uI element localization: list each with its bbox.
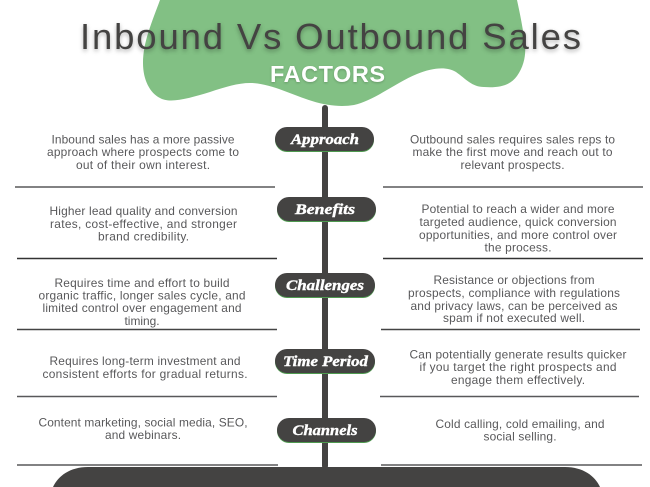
outbound time period text: if you target the right prospects and [420, 360, 616, 374]
outbound benefits text: targeted audience, quick conversion [420, 215, 616, 229]
channels dividers [17, 464, 642, 466]
subtitle: factors: FACTORS [270, 61, 385, 87]
inbound time period text [42, 354, 248, 381]
outbound time period text: engage them effectively. [451, 373, 585, 387]
outbound benefits text: opportunities, and more control over [419, 228, 617, 242]
outbound benefits text: the process. [484, 240, 552, 254]
benefits pill [277, 197, 376, 222]
outbound approach text: make the first move and reach out to [412, 145, 613, 159]
challenges pill: Challenges [286, 278, 364, 294]
time period pill: Time Period [283, 354, 369, 370]
outbound challenges text [408, 273, 620, 325]
challenges dividers [17, 328, 640, 330]
approach pill [275, 127, 374, 152]
outbound channels text [436, 417, 604, 444]
outbound approach text: relevant prospects. [460, 158, 564, 172]
time period pill [275, 349, 375, 374]
inbound approach text [47, 132, 239, 172]
row: approach [15, 127, 643, 187]
row: channels [17, 416, 642, 465]
challenges pill [275, 273, 375, 298]
approach dividers [15, 186, 643, 188]
inbound channels text: and webinars. [105, 428, 181, 442]
inbound approach text: out of their own interest. [76, 158, 210, 172]
row: challenges [17, 273, 640, 330]
outbound channels text: Cold calling, cold emailing, and [436, 417, 604, 431]
inbound challenges text [38, 276, 246, 328]
outbound time period text [410, 348, 627, 387]
approach pill: Approach [290, 132, 359, 148]
inbound benefits text: brand credibility. [98, 230, 189, 244]
time period dividers [17, 396, 639, 398]
row: benefits [17, 197, 643, 258]
inbound approach text: Inbound sales has a more passive [52, 132, 235, 146]
inbound challenges text: Requires time and effort to build [54, 276, 230, 290]
outbound approach text [410, 132, 615, 172]
channels pill: Channels [292, 423, 358, 439]
bottom dark panel [53, 467, 600, 487]
inbound benefits text: Higher lead quality and conversion [50, 204, 238, 218]
benefits dividers [17, 258, 643, 260]
inbound channels text: Content marketing, social media, SEO, [38, 416, 248, 430]
benefits pill: Benefits [294, 202, 355, 218]
inbound channels text [38, 416, 248, 442]
inbound time period text: Requires long-term investment and [50, 354, 240, 368]
inbound challenges text: organic traffic, longer sales cycle, and [38, 288, 246, 302]
outbound channels text: social selling. [484, 430, 556, 444]
central timeline stem [322, 105, 328, 469]
channels pill [277, 418, 376, 443]
outbound challenges text: Resistance or objections from [434, 273, 595, 287]
inbound challenges text: timing. [124, 314, 160, 328]
outbound time period text: Can potentially generate results quicker [410, 348, 627, 362]
title: Inbound Vs Outbound Sales [80, 16, 581, 57]
outbound benefits text [419, 202, 617, 254]
inbound challenges text: limited control over engagement and [42, 301, 242, 315]
inbound benefits text [50, 204, 238, 244]
inbound time period text: consistent efforts for gradual returns. [42, 367, 248, 381]
outbound benefits text: Potential to reach a wider and more [422, 202, 615, 216]
outbound challenges text: prospects, compliance with regulations [408, 286, 620, 300]
outbound challenges text: spam if not executed well. [443, 311, 585, 325]
inbound approach text: approach where prospects come to [47, 145, 239, 159]
row: time period [17, 348, 639, 396]
outbound challenges text: and privacy laws, can be perceived as [410, 299, 618, 313]
outbound approach text: Outbound sales requires sales reps to [410, 132, 615, 146]
green blob background [143, 0, 525, 106]
inbound benefits text: rates, cost-effective, and stronger [50, 217, 237, 231]
